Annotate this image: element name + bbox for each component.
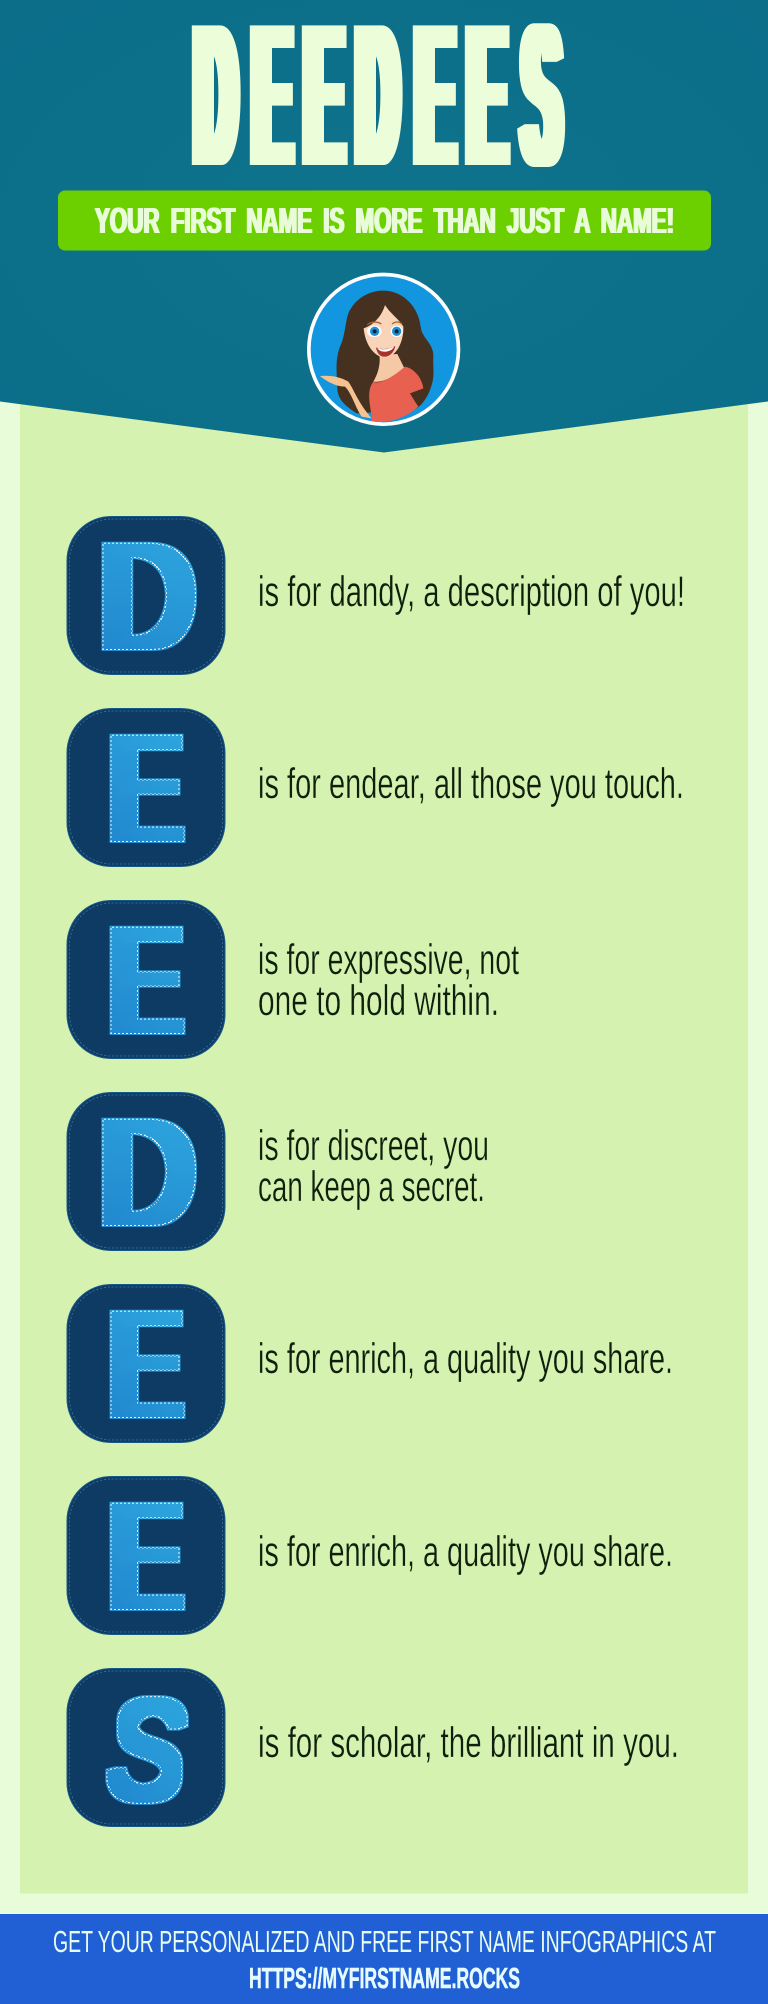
icon: letter E [67, 1280, 225, 1448]
row 7: letter S [67, 1668, 679, 1828]
subtitle banner [58, 190, 711, 250]
icon: letter E: E [111, 704, 180, 872]
text: expressive: is for expressive, not [258, 936, 519, 984]
text: discreet: is for discreet, you [258, 1122, 489, 1170]
icon: letter E [67, 1472, 225, 1640]
footer band [0, 1914, 768, 2004]
header banner: teal chevron [0, 0, 768, 452]
row 3: letter E [67, 896, 519, 1064]
icon: letter D: D [101, 1088, 193, 1256]
icon: letter D [67, 1088, 225, 1256]
row 2: letter E [67, 704, 684, 872]
row 5: letter E [67, 1280, 673, 1448]
text: within: one to hold within. [258, 977, 499, 1025]
row 6: letter E [67, 1472, 673, 1640]
row 1: letter D [67, 512, 685, 680]
icon: letter S [67, 1668, 225, 1828]
footer url: HTTPS://MYFIRSTNAME.ROCKS [249, 1963, 520, 1995]
icon: letter E [67, 704, 225, 872]
icon: letter E [67, 896, 225, 1064]
icon: letter D [67, 512, 225, 680]
panel: letters background [20, 390, 748, 1894]
icon: letter E: E [111, 896, 180, 1064]
icon: letter E: E [111, 1472, 180, 1640]
icon: letter D: D [101, 512, 193, 680]
icon: letter E: E [111, 1280, 180, 1448]
text: secret: can keep a secret. [258, 1163, 485, 1211]
avatar: cartoon woman in circle [307, 273, 460, 426]
row 4: letter D [67, 1088, 489, 1256]
icon: letter S: S [108, 1674, 184, 1828]
